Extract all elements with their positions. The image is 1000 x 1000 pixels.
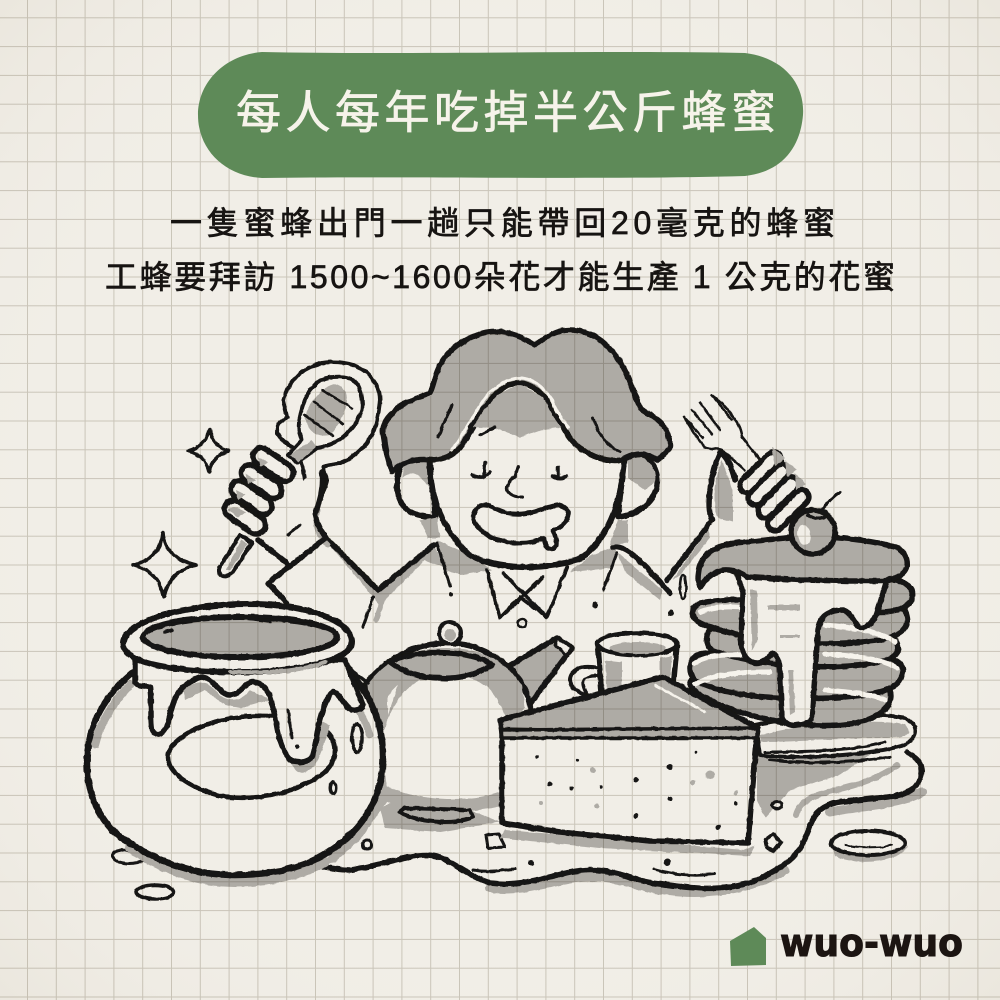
jar body	[87, 667, 383, 875]
brand name: wuo-wuo	[780, 921, 963, 965]
teapot body	[363, 622, 531, 822]
honey puddle	[112, 700, 922, 899]
logo	[730, 921, 963, 966]
pancake stack	[690, 492, 916, 763]
pancake layers	[690, 579, 913, 725]
syrup drip	[698, 537, 907, 725]
honey drip over jar	[135, 660, 363, 773]
person: hair	[383, 330, 670, 472]
jar cast shadow	[130, 770, 388, 882]
illustration: person surrounded by honey foods	[87, 330, 922, 899]
title banner	[198, 52, 803, 178]
honey dipper	[219, 362, 380, 576]
sparkle small	[188, 429, 229, 472]
teapot	[363, 622, 572, 822]
person: body and shirt	[325, 538, 686, 627]
cheesecake slice	[500, 677, 758, 856]
sparkle large	[133, 533, 196, 597]
jar label highlight	[168, 716, 335, 798]
jar rim and honey surface	[123, 604, 368, 683]
honey jar	[87, 604, 388, 882]
person: honey mouth	[473, 505, 569, 549]
right hand fingers and wrist	[667, 447, 812, 580]
coffee cup	[570, 633, 677, 700]
icon: green house	[730, 927, 766, 966]
teapot spout	[507, 638, 572, 708]
person: ears	[397, 453, 657, 545]
subtitle line one: 一隻蜜蜂出門一趟只能帶回20毫克的蜂蜜	[170, 205, 835, 241]
left hand fingers and wrist	[221, 444, 328, 603]
left hand holding honey dipper	[219, 362, 380, 603]
person: face	[430, 400, 625, 567]
right hand holding fork	[667, 395, 812, 580]
jar bubbles	[330, 724, 362, 794]
cherry on top	[791, 492, 840, 554]
fork	[684, 395, 760, 475]
subtitle line two: 工蜂要拜訪 1500~1600朵花才能生產 1 公克的花蜜	[105, 259, 895, 295]
plate	[755, 715, 916, 763]
person: collar	[487, 567, 567, 618]
title text: 每人每年吃掉半公斤蜂蜜	[236, 87, 776, 138]
